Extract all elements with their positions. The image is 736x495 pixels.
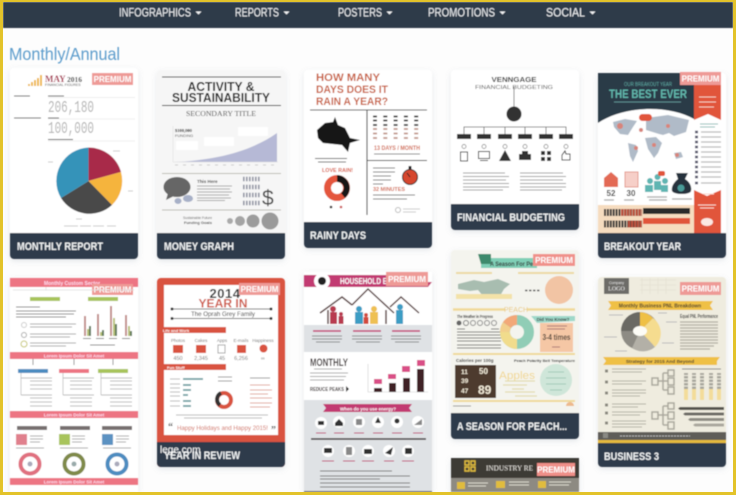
premium badge: PREMIUM: [94, 286, 132, 294]
poster heading: SECONDARY TITLE: [186, 109, 256, 118]
poster heading: 2014: [210, 286, 241, 301]
stat strip: [457, 481, 571, 489]
holiday quote: “: [168, 422, 173, 433]
holiday quote: Happy Holidays and Happy 2015!: [177, 425, 268, 432]
org tree: [457, 87, 573, 161]
header banner: HOUSEHOLD E: [340, 277, 388, 286]
poster heading: DAYS DOES IT: [316, 84, 388, 96]
stat icons: 30: [627, 189, 636, 198]
premium badge: [680, 282, 721, 295]
premium badge: PREMIUM: [241, 285, 279, 294]
panel: card breakout year: [598, 72, 726, 258]
label: [598, 233, 726, 258]
life and work stats: Cakes: [195, 338, 208, 343]
right text block: [680, 314, 718, 349]
navigation bar: [3, 2, 733, 28]
label: FINANCIAL BUDGETING: [457, 212, 565, 224]
beige pictogram band: [598, 205, 694, 233]
dots pictogram: [373, 116, 421, 154]
life and work stats: 2,345: [194, 356, 208, 362]
life and work stats: [163, 327, 274, 362]
poster heading: ACTIVITY &: [188, 80, 254, 94]
calories section: 89: [478, 383, 492, 397]
yellow ribbon: Strategy for 2015 And Beyond: [626, 359, 694, 365]
calories section: 11: [461, 369, 468, 376]
panel: card business 3: [598, 277, 726, 467]
icon: yellow grid: [465, 461, 475, 471]
teal circle: [514, 358, 576, 396]
org diagrams: [652, 370, 674, 429]
monthly section: [310, 357, 349, 393]
premium badge: PREMIUM: [94, 75, 132, 84]
watermark: lege.com: [160, 445, 201, 456]
label: [157, 233, 285, 259]
premium badge: [239, 283, 280, 295]
panel: card rainy days: [304, 70, 432, 248]
dark header: [598, 73, 694, 123]
three lists: [18, 359, 132, 406]
section bar: Lorem Ipsum Dolor Sit Amet: [44, 354, 105, 358]
yellow ribbon: [603, 357, 720, 365]
love rain donut: LOVE RAIN!: [322, 168, 353, 174]
life and work stats: 6,256: [234, 356, 248, 362]
arrow bars: [678, 407, 724, 426]
poster heading: SUSTAINABILITY: [172, 91, 271, 105]
premium badge: PREMIUM: [682, 74, 720, 84]
holiday quote: ”: [271, 425, 276, 436]
world map: [613, 114, 689, 162]
dots pictogram: 13 DAYS / MONTH: [374, 145, 420, 152]
stopwatch stat: 32 MINUTES: [373, 187, 405, 193]
did you know: 3-4 times: [542, 333, 571, 342]
navigation bar: POSTERS: [338, 6, 382, 20]
holiday quote: [168, 422, 276, 436]
weather progress: The Weather in Progress: [457, 314, 493, 320]
funding goals: Funding Goals: [184, 220, 213, 225]
did you know: Did You Know?: [537, 317, 570, 322]
label: [598, 443, 726, 467]
section bar: [10, 411, 138, 418]
poster heading: The Oprah Grey Family: [191, 312, 255, 318]
yellow ribbon: Monthly Business PNL Breakdown: [619, 304, 701, 310]
section bar: Lorem Ipsum Dolor Sit Amet: [44, 480, 105, 484]
report title: MAY: [45, 74, 66, 84]
stat icons: [604, 171, 692, 200]
label: YEAR IN REVIEW: [164, 450, 241, 462]
label: [451, 413, 579, 439]
header banner: [304, 273, 432, 289]
life and work stats: Life and Work: [163, 328, 190, 333]
poster heading: HOW MANY: [316, 72, 381, 84]
premium badge: [533, 254, 575, 266]
header ribbon: [478, 254, 537, 268]
life and work stats: E-mails: [233, 338, 249, 343]
life and work stats: ∞: [261, 356, 265, 362]
label: RAINY DAYS: [310, 230, 366, 242]
navigation bar: REPORTS: [235, 6, 279, 20]
section bar: Lorem Ipsum Dolor Sit Amet: [44, 412, 105, 418]
premium badge: [680, 72, 721, 85]
report title: [45, 74, 82, 87]
bar chart: [83, 306, 131, 345]
people columns: [682, 369, 721, 400]
poster heading: [609, 82, 687, 102]
bullet list: [605, 369, 646, 427]
footer mark: [453, 405, 471, 407]
calories section: 47: [461, 388, 469, 395]
map and peach circle: [456, 273, 574, 304]
label: [157, 442, 285, 467]
right list: [695, 124, 721, 183]
did you know: [531, 316, 575, 352]
life and work stats: Photos: [171, 338, 186, 343]
red callout block: [694, 190, 721, 233]
stopwatch stat: [373, 166, 420, 212]
red ribbon: [694, 73, 721, 120]
section bar: [10, 478, 138, 485]
footer band: [598, 432, 726, 443]
header bar: Monthly Custom Sector: [44, 281, 100, 287]
intro and icons: [13, 287, 134, 347]
label: BUSINESS 3: [604, 451, 659, 463]
right text block: Equal PNL Performance: [680, 314, 718, 320]
body text: [463, 173, 566, 190]
icon: rising bars logo: [28, 75, 42, 86]
funding goals: [183, 212, 278, 230]
report title: FINANCIAL FIGURES: [45, 83, 81, 87]
stat icons: 52: [607, 189, 616, 198]
area chart: $100,000: [175, 128, 193, 133]
logo mark: [566, 402, 574, 406]
calories section: 39: [461, 378, 469, 385]
area chart: FUNDING: [175, 133, 193, 138]
poster heading: OUR BREAKOUT YEAR: [624, 82, 672, 88]
peach divider: PEACH: [504, 307, 528, 314]
section bar: [10, 352, 138, 359]
grey usage band: [304, 400, 432, 492]
panel: card money graph: [157, 70, 285, 259]
calories section: Calories per 100g: [456, 358, 494, 363]
funding goals: Sustainable Future: [183, 215, 213, 220]
label: [451, 204, 579, 230]
life and work stats: Happiness: [252, 338, 274, 343]
label: MONEY GRAPH: [164, 241, 234, 253]
calories section: 50: [479, 367, 488, 376]
energy bar chart: [368, 360, 428, 392]
panel: card industry report: [451, 458, 579, 492]
title: INDUSTRY RE: [486, 464, 533, 472]
kpi figures: 206,180: [48, 99, 94, 118]
speech bubbles and dollars: This Here: [197, 179, 218, 184]
kpi figures: 100,000: [48, 120, 94, 139]
peach donut: [505, 320, 529, 344]
kpi figures: [14, 96, 135, 141]
teal circle: Peach Polarity Bell Temperature: [514, 358, 576, 363]
navigation bar: INFOGRAPHICS: [119, 6, 191, 20]
poster heading: THE BEST EVER: [609, 87, 687, 101]
navigation bar: SOCIAL: [546, 6, 585, 20]
life and work stats: 450: [173, 356, 183, 362]
label: BREAKOUT YEAR: [604, 241, 681, 253]
panel: card business report pink: [10, 278, 138, 492]
speech bubbles and dollars: [162, 174, 281, 210]
poster heading: RAIN A YEAR?: [316, 96, 388, 108]
panel: card monthly report: [10, 68, 138, 259]
calories section: Apples: [499, 370, 536, 382]
peach divider: [453, 304, 575, 314]
poster heading: FINANCIAL BUDGETING: [475, 85, 553, 91]
area chart: [173, 126, 278, 165]
report title: 2016: [67, 75, 82, 84]
weather progress: [456, 314, 501, 348]
donut rings: [16, 426, 132, 474]
pie chart: [48, 147, 133, 226]
header bar: [10, 278, 138, 287]
panel: card financial budgeting: [451, 70, 579, 230]
premium badge: [92, 73, 133, 85]
donut chart: [604, 312, 677, 351]
premium badge: PREMIUM: [537, 466, 575, 474]
panel: card season for peach: [451, 250, 579, 439]
company logo: Company: [609, 281, 624, 285]
family houses: [320, 289, 419, 324]
fun stuff charts: Fun Stuff: [167, 365, 185, 370]
speech bubbles and dollars: $: [262, 187, 274, 210]
panel: card year in review: [157, 278, 285, 467]
label: [10, 233, 138, 259]
poster heading: VENNGAGE: [492, 75, 536, 84]
monthly section: MONTHLY: [310, 357, 348, 369]
premium badge: PREMIUM: [682, 284, 720, 294]
poster heading: [316, 72, 388, 108]
premium badge: PREMIUM: [388, 275, 426, 284]
poster heading: [475, 75, 553, 91]
section heading: Monthly/Annual: [9, 44, 120, 64]
header ribbon: A Season For Pea: [490, 262, 537, 268]
yellow ribbon: [608, 301, 713, 310]
label: A SEASON FOR PEACH...: [457, 421, 567, 433]
premium badge: [386, 272, 428, 286]
panel: card household energy: [304, 272, 432, 492]
poster heading: [162, 77, 281, 118]
navigation bar: PROMOTIONS: [428, 6, 495, 20]
label: MONTHLY REPORT: [17, 241, 103, 253]
premium badge: PREMIUM: [535, 256, 573, 265]
poster heading: YEAR IN: [198, 298, 248, 310]
icon: map of Canada: [317, 117, 360, 152]
poster heading: [170, 286, 272, 320]
love rain donut: [315, 158, 353, 208]
company logo: LOGO: [608, 286, 625, 292]
label: [304, 222, 432, 248]
grey usage band: When do you use energy?: [340, 406, 396, 412]
life and work stats: 45: [219, 356, 225, 362]
calories section: [455, 358, 537, 398]
company logo: [604, 278, 629, 294]
monthly section: REDUCE PEAKS: [310, 387, 344, 393]
grey housing band: [304, 325, 432, 352]
fun stuff charts: [164, 364, 272, 418]
life and work stats: Apps: [217, 338, 228, 343]
